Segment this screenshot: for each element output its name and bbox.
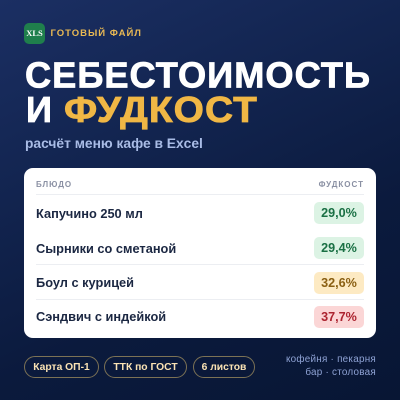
badge: 32,6% bbox=[314, 272, 364, 294]
row label: cappuccino: Капучино 250 мл bbox=[36, 206, 143, 221]
column header: food cost: ФУДКОСТ bbox=[319, 180, 364, 188]
badge: 29,4%: 29,4% bbox=[321, 241, 357, 255]
title: И bbox=[26, 89, 52, 130]
badge: 32,6%: 32,6% bbox=[321, 276, 357, 290]
title: ФУДКОСТ bbox=[64, 89, 258, 130]
tag: form OP-1 bbox=[24, 356, 99, 378]
audience text: кофейня · пекарня bbox=[286, 354, 376, 364]
tag: sheets: 6 листов bbox=[202, 362, 246, 373]
icon: XLS badge: XLS bbox=[26, 28, 43, 38]
column header: dish: БЛЮДО bbox=[36, 180, 72, 188]
badge: 29,0%: 29,0% bbox=[321, 206, 357, 220]
tag: form OP-1: Карта ОП-1 bbox=[33, 362, 90, 373]
badge: 37,7% bbox=[314, 306, 364, 328]
row label: syrniki: Сырники со сметаной bbox=[36, 240, 176, 256]
eyebrow: ready file: ГОТОВЫЙ ФАЙЛ bbox=[50, 28, 142, 39]
row label: sandwich: Сэндвич с индейкой bbox=[36, 309, 166, 324]
title bbox=[25, 54, 371, 130]
badge: 37,7%: 37,7% bbox=[321, 310, 357, 324]
tag: TTK bbox=[104, 356, 187, 378]
audience text bbox=[286, 354, 376, 378]
subtitle: расчёт меню кафе в Excel bbox=[25, 136, 203, 151]
title: СЕБЕСТОИМОСТЬ bbox=[25, 54, 371, 96]
icon: XLS badge bbox=[24, 23, 45, 44]
badge: 29,0% bbox=[314, 202, 364, 224]
tag: sheets bbox=[193, 356, 255, 378]
row label: bowl: Боул с курицей bbox=[36, 275, 134, 290]
audience text: бар · столовая bbox=[305, 367, 376, 378]
tag: TTK: ТТК по ГОСТ bbox=[113, 362, 178, 373]
panel: food cost table bbox=[24, 168, 376, 338]
badge: 29,4% bbox=[314, 237, 364, 258]
